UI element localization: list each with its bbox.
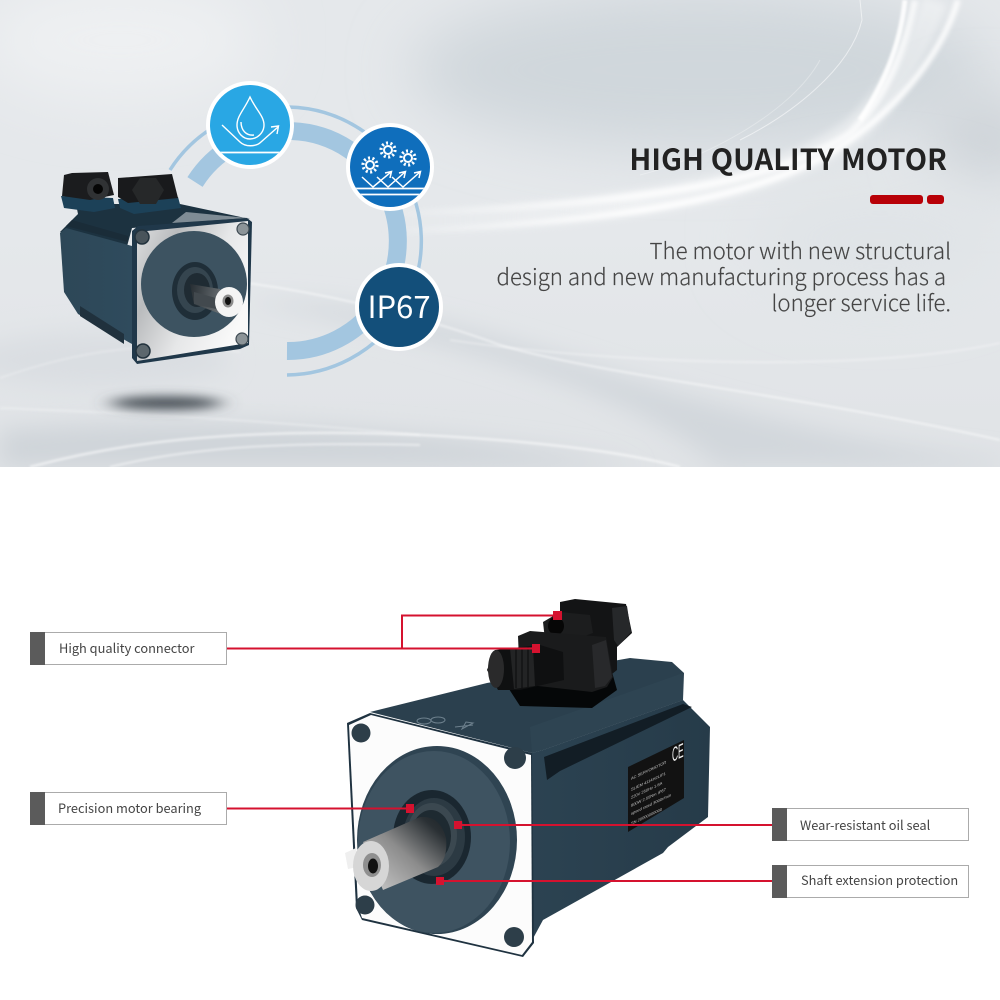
icon: wear and particle resistance [345, 123, 435, 211]
callout: wear-resistant oil seal: Wear-resistant oil seal [800, 814, 930, 834]
connectors [487, 599, 632, 708]
rating label plate: AC SERVOMOTOR [631, 760, 666, 781]
motor neck and top face [60, 204, 250, 250]
callout: wear-resistant oil seal [772, 808, 969, 841]
warning marks [417, 717, 473, 729]
description paragraph: longer service life. [771, 286, 951, 318]
rating label plate [628, 740, 684, 832]
callout: high quality connector: High quality connector [59, 638, 195, 656]
top face [370, 658, 684, 753]
description paragraph [496, 234, 951, 318]
callout markers [406, 611, 562, 885]
side slot [544, 704, 692, 780]
callout: precision motor bearing [30, 792, 227, 825]
front plate [347, 713, 534, 957]
top banner with motor and feature icons [0, 0, 1000, 467]
front disc [357, 746, 517, 934]
mounting holes [135, 223, 249, 358]
banner background [0, 0, 1000, 467]
callout leader lines [227, 616, 772, 881]
rating label plate: 220V 250Hz 1.8A [631, 780, 662, 800]
rating label plate: SLIEM 4114H2LIF1 [631, 771, 666, 792]
rating label plate: CE [672, 740, 684, 767]
front disc, hub and shaft [141, 231, 247, 337]
motor housing [370, 658, 710, 957]
callout: shaft extension protection: Shaft extension protection [801, 870, 958, 888]
heading: HIGH QUALITY MOTOR [629, 137, 947, 179]
motor floor shadow [110, 396, 222, 410]
rating label plate: speed rated 3000r/min [631, 792, 672, 816]
rating label plate: 800W 2.55Nm IP67 [631, 787, 666, 808]
decorative arcs linking icons [170, 107, 421, 375]
red accent bars [870, 195, 944, 204]
motor body [60, 228, 132, 344]
silver front plate [132, 218, 252, 364]
description paragraph: design and new manufacturing process has a [496, 260, 946, 292]
upper side rail [530, 673, 683, 753]
callout: precision motor bearing: Precision motor bearing [58, 798, 201, 816]
description paragraph: The motor with new structural [650, 234, 951, 266]
mounting holes [352, 724, 526, 947]
connector blocks [61, 172, 181, 214]
callout: shaft extension protection [772, 865, 969, 898]
callout: high quality connector [30, 632, 227, 665]
large annotated motor [227, 599, 772, 957]
icon: water repellent [205, 81, 295, 169]
side face [523, 700, 710, 957]
output shaft [345, 817, 446, 891]
icon: IP67 badge [355, 263, 443, 351]
icon: IP67 badge: IP67 [367, 282, 431, 327]
rating label plate: SN 20000000000 [631, 806, 663, 826]
small motor illustration [60, 172, 252, 364]
oil seal hub [393, 790, 471, 884]
